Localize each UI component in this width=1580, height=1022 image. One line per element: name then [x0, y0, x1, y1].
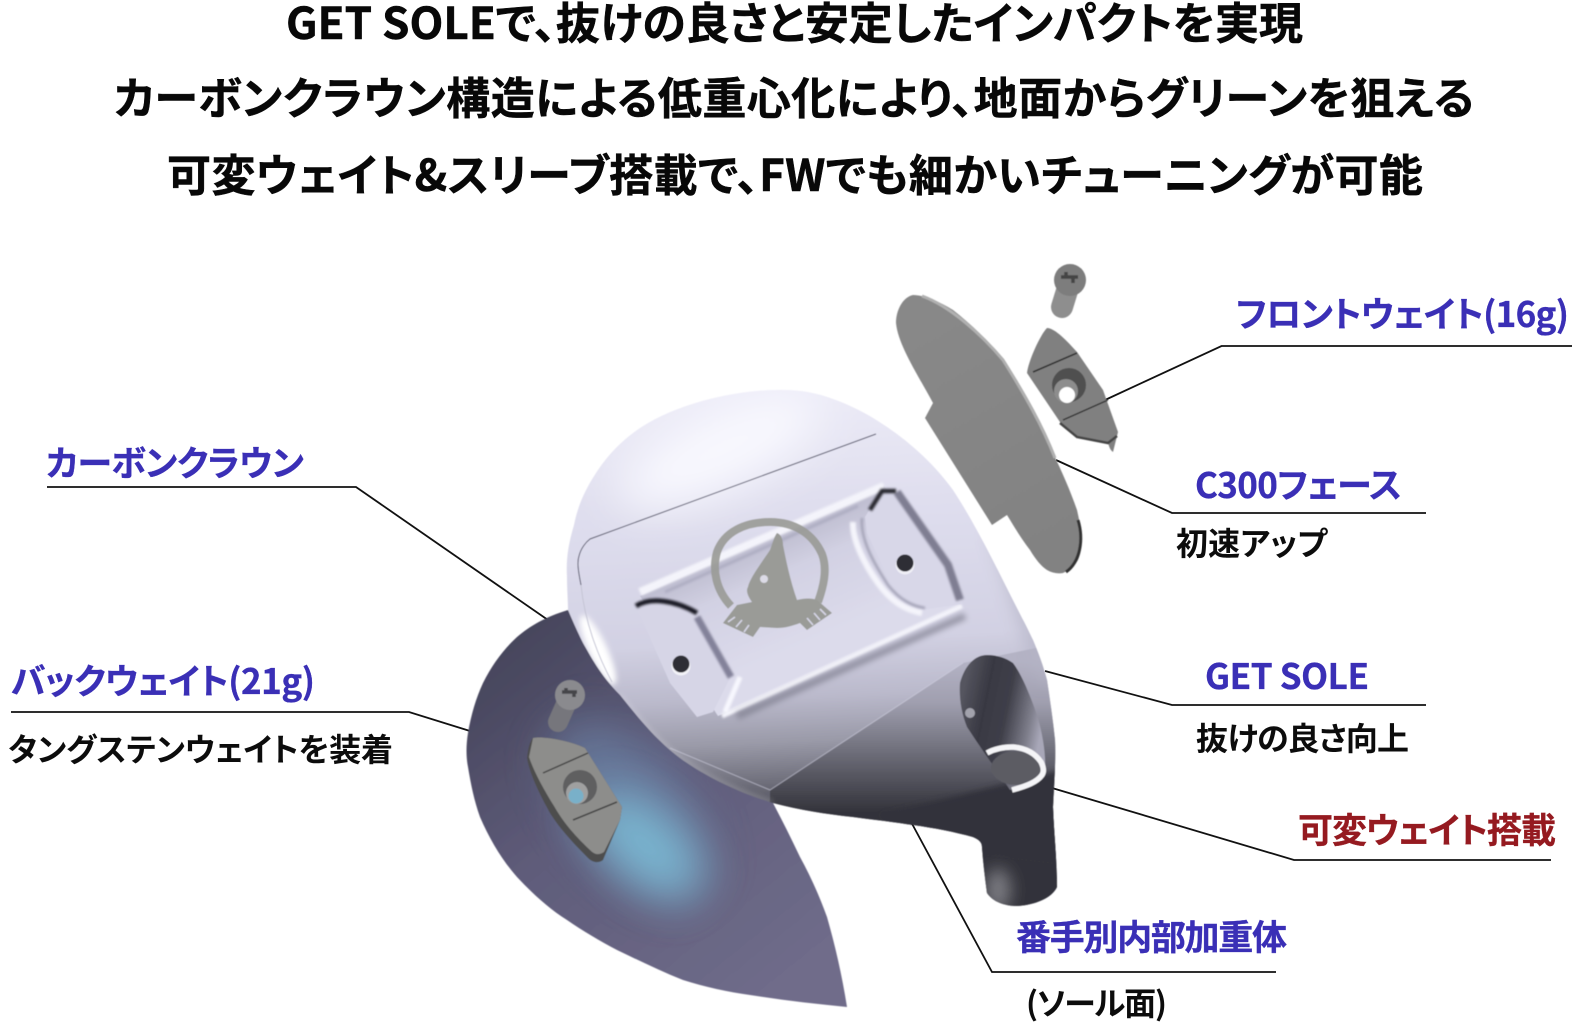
leader line [1105, 346, 1572, 400]
C300 face plate [896, 295, 1082, 573]
white hosel ring [987, 747, 1043, 790]
crease line [670, 663, 963, 790]
front weight [1027, 328, 1118, 452]
leader line [1056, 460, 1426, 513]
crown seam line [578, 434, 876, 585]
sub label: タングステンウェイトを装着 [8, 725, 393, 771]
callout: carbon crown [46, 436, 548, 620]
leader line [910, 820, 1276, 972]
label: C300フェース [1195, 458, 1402, 509]
club head body [567, 367, 1075, 920]
left slot [636, 600, 730, 717]
leader line [11, 712, 470, 731]
label: 番手別内部加重体 [1016, 910, 1287, 961]
plate top ridge [640, 486, 884, 592]
label: カーボンクラウン [46, 436, 304, 487]
callout: front weight [1105, 287, 1572, 400]
plate base [640, 486, 962, 716]
back weight [527, 738, 622, 862]
label: 可変ウェイト搭載 [1298, 803, 1556, 854]
screw hole right [896, 556, 914, 574]
crown highlight [620, 401, 808, 518]
leader line [1045, 671, 1426, 705]
callout: internal weight [910, 820, 1287, 1022]
leader line [1052, 788, 1551, 860]
lower rim light [640, 719, 774, 802]
screw hole left [672, 656, 690, 676]
headline line 3: 可変ウェイト&スリーブ搭載で、FWでも細かいチューニングが可能 [167, 140, 1423, 204]
mole logo [715, 522, 832, 637]
back screw [555, 680, 585, 722]
GET SOLE plate [636, 486, 965, 717]
front screw [1054, 264, 1086, 307]
carbon crown panel [466, 610, 847, 1007]
headline [114, 0, 1474, 204]
label: GET SOLE [1205, 649, 1369, 700]
plate bottom ridge [722, 606, 962, 716]
sub label: 抜けの良さ向上 [1196, 714, 1409, 760]
callout: C300 face [1056, 458, 1426, 565]
headline line 2: カーボンクラウン構造による低重心化により、地面からグリーンを狙える [114, 63, 1474, 127]
callout: GET SOLE [1045, 649, 1426, 760]
exploded club head diagram [466, 264, 1118, 1007]
lower shadow area [770, 648, 1058, 906]
label: バックウェイト(21g) [11, 654, 315, 705]
hosel pocket [960, 655, 1045, 790]
dark neck [921, 768, 1056, 854]
sub label: 初速アップ [1176, 519, 1328, 565]
hosel light edge [985, 868, 1011, 912]
right slot [865, 488, 963, 610]
leader line [47, 487, 548, 620]
label: フロントウェイト(16g) [1236, 287, 1569, 338]
callout: adjustable weight [1052, 788, 1556, 860]
callout: back weight [8, 654, 470, 771]
